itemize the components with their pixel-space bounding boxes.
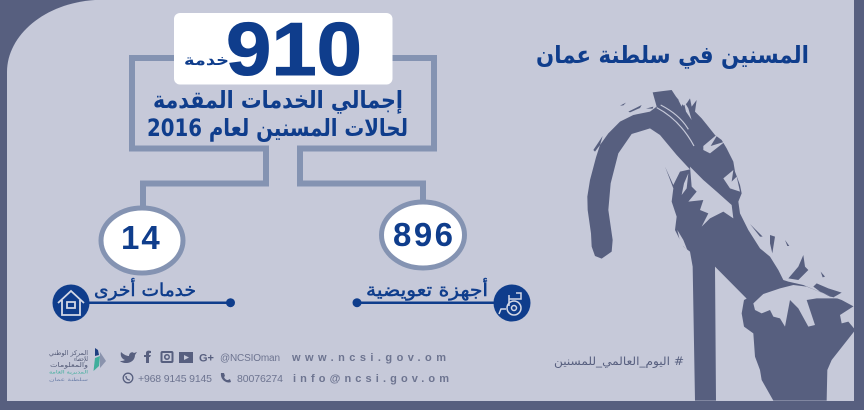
callout: total 910: 910 <box>226 7 362 91</box>
connector lines <box>132 58 434 208</box>
social handle: @NCSIOman <box>220 353 280 364</box>
illustration: elderly figure with cane <box>587 90 854 401</box>
text block: total services description <box>147 86 408 142</box>
icon: youtube <box>179 352 193 363</box>
icon: whatsapp <box>123 373 133 383</box>
website: www.ncsi.gov.om <box>291 352 446 364</box>
phone mobile: +968 9145 9145 <box>138 373 212 385</box>
stat: 14 other services: 14 <box>121 219 162 256</box>
figure highlights <box>677 100 854 328</box>
icon: house <box>52 284 90 322</box>
logo text: للإحصاء <box>74 355 88 363</box>
phone landline: 80076274 <box>237 373 283 385</box>
email: info@ncsi.gov.om <box>293 373 449 385</box>
stat: 896 assistive devices: 896 <box>393 216 453 253</box>
text block: total services description: إجمالي الخدمات المقدمة <box>153 86 403 114</box>
title: المسنين في سلطنة عمان <box>536 41 809 69</box>
label row: assistive devices <box>352 278 530 322</box>
callout: total 910 <box>174 7 392 91</box>
icon: phone <box>221 373 231 382</box>
social icons <box>120 351 214 364</box>
icon: wheelchair <box>494 284 530 322</box>
text block: total services description: لحالات المسنين لعام 2016 <box>147 114 408 142</box>
label row: assistive devices: أجهزة تعويضية <box>366 278 488 301</box>
icon: instagram <box>160 351 174 363</box>
callout: total 910: خدمة <box>184 51 229 69</box>
stat: 14 other services <box>101 208 183 273</box>
icon: facebook <box>144 351 151 363</box>
logo text <box>49 349 88 383</box>
hashtag: # اليوم_العالمي_للمسنين <box>554 354 684 369</box>
icon: twitter <box>120 352 137 363</box>
logo <box>49 348 106 383</box>
label row: other services: خدمات أخرى <box>94 278 196 301</box>
icon: google plus: G+ <box>199 352 214 364</box>
stat: 896 assistive devices <box>382 202 464 268</box>
logo mark <box>94 348 106 371</box>
logo text: المركز الوطني <box>49 349 88 357</box>
logo text: المديرية العامة <box>49 370 88 376</box>
label row: other services <box>52 278 235 322</box>
figure strokes <box>593 103 842 297</box>
logo text: والمعلومات <box>50 361 88 369</box>
logo text: سلطنة عمان <box>49 378 88 383</box>
